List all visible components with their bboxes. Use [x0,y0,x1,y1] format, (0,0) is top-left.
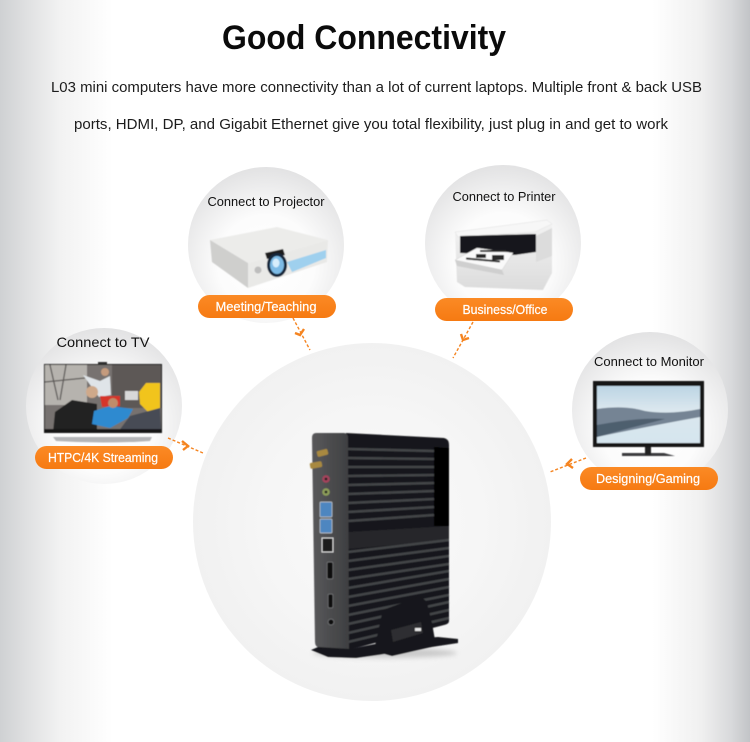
label: designing/gaming: Designing/Gaming [596,471,700,486]
circle [572,332,728,488]
intro paragraph: L03 mini computers have more connectivity than a lot of current laptops. Multiple front & back USB [51,80,702,96]
label: meeting/teaching [198,295,336,318]
wifi antenna connectors [310,449,329,469]
stand [311,597,458,658]
label: connect to printer: Connect to Printer [452,190,556,204]
HDMI port [327,562,333,579]
central circle [193,343,551,701]
icon: projector [210,227,328,288]
label: business/office [435,298,573,321]
mini PC [310,433,458,658]
panel: monitor [550,332,728,490]
label: connect to TV: Connect to TV [56,334,150,350]
power jack [328,619,334,625]
label: HTPC/4K streaming [35,446,173,469]
icon: printer [455,220,552,290]
arrow: printer to mini PC [453,322,473,358]
DP port [328,594,333,608]
front port panel [312,433,349,650]
panel: TV [26,328,203,484]
circle [188,167,344,323]
intro paragraph [51,80,702,133]
arrow: monitor to mini PC [550,458,586,472]
panel: central mini PC [193,343,551,701]
label: meeting/teaching: Meeting/Teaching [216,299,316,314]
panel: projector [188,167,344,350]
circle [425,165,581,321]
label: HTPC/4K streaming: HTPC/4K Streaming [48,450,158,465]
ethernet port [322,538,333,552]
arrow: TV to mini PC [168,438,203,453]
audio jacks [322,475,330,483]
label: business/office: Business/Office [462,302,548,317]
panel: printer [425,165,581,358]
label: designing/gaming [580,467,718,490]
label: connect to projector: Connect to Projector [208,195,324,209]
USB ports [320,502,332,533]
icon: TV [44,362,162,442]
icon: monitor [593,381,704,456]
arrow: projector to mini PC [293,318,310,350]
title: Good Connectivity [222,19,506,57]
label: connect to monitor: Connect to Monitor [594,355,704,369]
circle [26,328,182,484]
intro paragraph: ports, HDMI, DP, and Gigabit Ethernet give you total flexibility, just plug in and get to work [74,117,669,133]
